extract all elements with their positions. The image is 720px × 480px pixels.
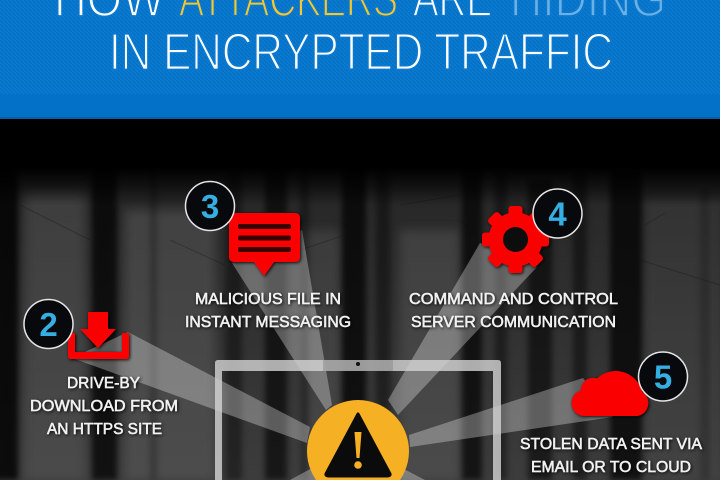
label bbox=[30, 375, 178, 438]
label: DRIVE-BY bbox=[67, 375, 140, 392]
step 3: instant message bbox=[185, 182, 351, 331]
title: IN ENCRYPTED TRAFFIC bbox=[109, 24, 613, 82]
badge 2: 2 bbox=[39, 306, 58, 343]
label: AN HTTPS SITE bbox=[47, 421, 162, 438]
icon: cloud bbox=[572, 371, 648, 416]
label bbox=[185, 291, 351, 331]
header band bbox=[0, 0, 720, 119]
label: EMAIL OR TO CLOUD bbox=[531, 459, 691, 476]
badge 5 bbox=[638, 352, 688, 401]
label: MALICIOUS FILE IN bbox=[195, 291, 341, 308]
label bbox=[409, 291, 618, 331]
icon: speech bubble bbox=[229, 213, 300, 276]
label: STOLEN DATA SENT VIA bbox=[520, 436, 702, 453]
forest background bbox=[0, 119, 720, 480]
badge 3: 3 bbox=[201, 188, 219, 225]
label bbox=[520, 436, 702, 476]
icon: gear bbox=[482, 206, 549, 273]
badge 5: 5 bbox=[654, 358, 672, 396]
label: SERVER COMMUNICATION bbox=[411, 314, 616, 331]
badge 4: 4 bbox=[548, 196, 567, 232]
step 5: stolen data bbox=[520, 352, 702, 476]
step 4: command and control bbox=[409, 189, 618, 331]
label: INSTANT MESSAGING bbox=[185, 314, 351, 331]
badge 4 bbox=[533, 189, 582, 238]
badge 2 bbox=[24, 300, 73, 348]
step 2: drive-by download bbox=[24, 300, 178, 438]
title bbox=[54, 0, 666, 82]
label: COMMAND AND CONTROL bbox=[409, 291, 618, 308]
icon: download bbox=[68, 312, 129, 359]
laptop bbox=[215, 360, 501, 480]
warning icon bbox=[307, 400, 409, 480]
badge 3 bbox=[186, 182, 234, 230]
label: DOWNLOAD FROM bbox=[30, 398, 178, 415]
light beams bbox=[72, 230, 613, 480]
